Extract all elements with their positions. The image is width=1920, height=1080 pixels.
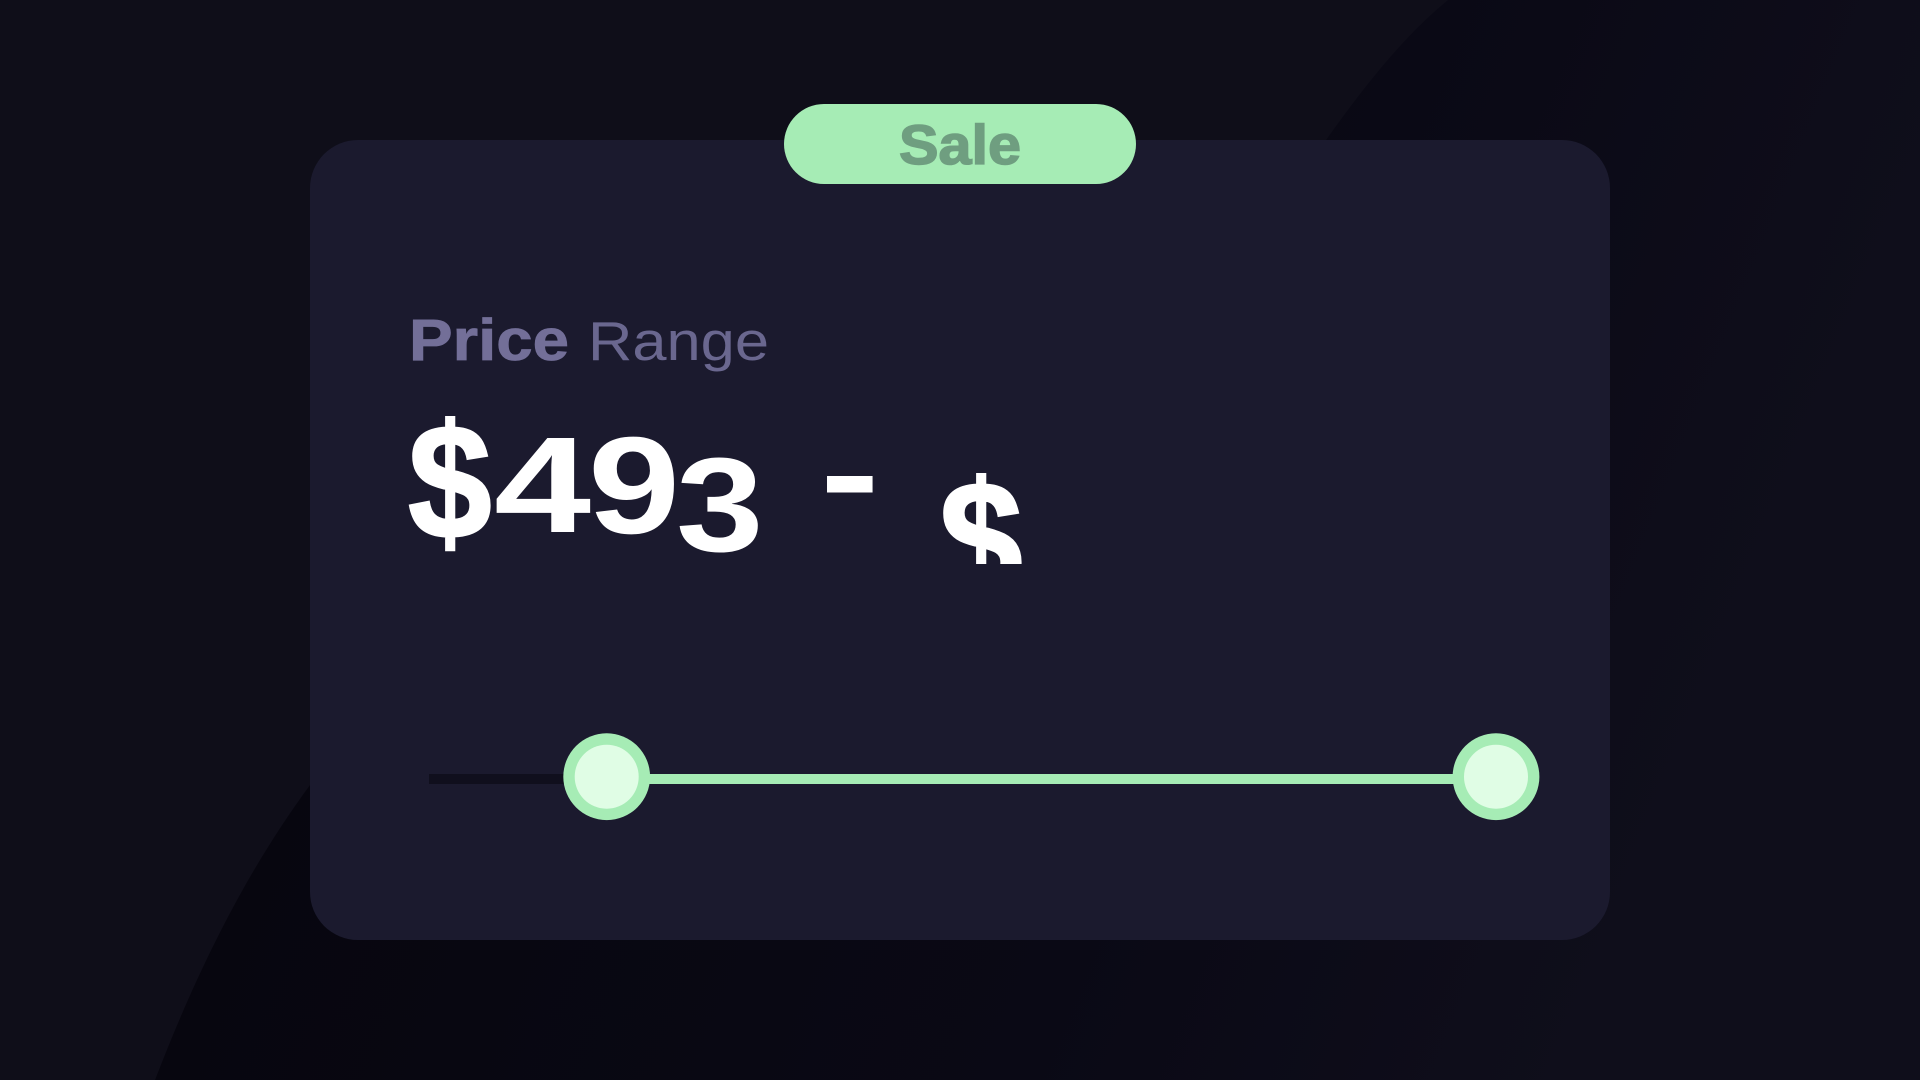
price readout: $493 - $: 3: [676, 430, 763, 579]
heading: Price Range: [409, 308, 769, 373]
slider handle: maximum: [1453, 733, 1539, 820]
price readout: $493 - $: $: [939, 449, 1023, 630]
price readout: $493 - $: [408, 416, 1022, 564]
heading: Price Range: Price: [409, 308, 569, 373]
badge label: Sale: Sale: [899, 113, 1021, 176]
heading: Price Range: Range: [588, 310, 769, 372]
panel: price range card: [310, 140, 1610, 940]
price readout: $493 - $: 9: [588, 409, 680, 563]
price range infographic canvas: [156, 104, 1610, 1080]
price readout: $493 - $: $: [408, 392, 492, 573]
sale badge: [784, 104, 1136, 184]
slider handle: minimum: [563, 733, 650, 820]
price readout: $493 - $: -: [820, 395, 880, 549]
price readout: $493 - $: 4: [494, 409, 591, 562]
range slider: [429, 733, 1539, 820]
